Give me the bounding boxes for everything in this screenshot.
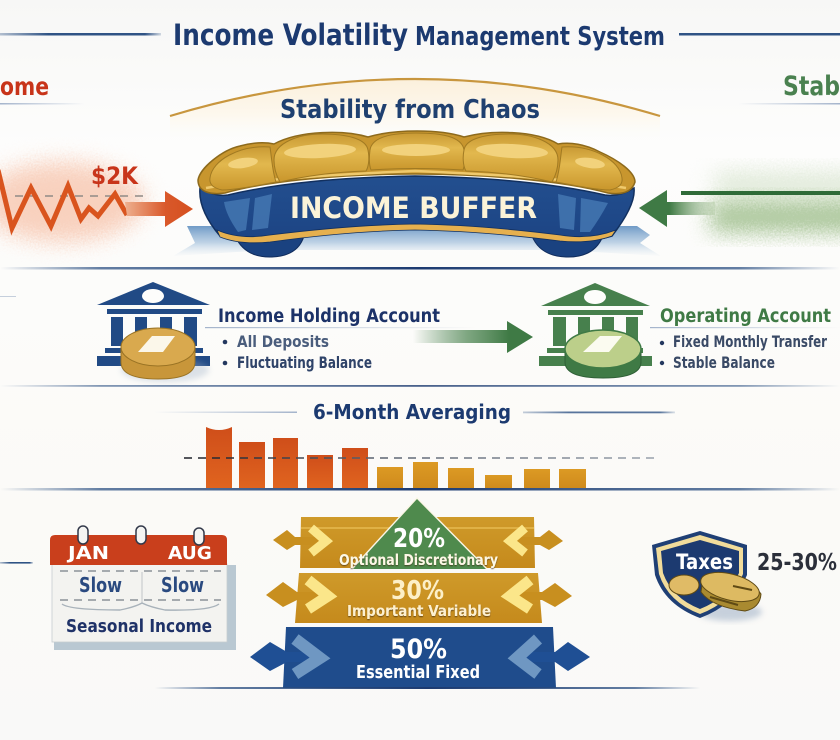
income buffer cushion — [173, 131, 661, 257]
taxes shield with coins: Taxes — [676, 550, 733, 574]
arrows right — [517, 530, 563, 550]
tier: 30% important variable: 30% — [391, 576, 444, 606]
icon: green coins — [565, 330, 641, 378]
list: holding account details: All Deposits — [237, 332, 329, 351]
cushion lobes — [210, 133, 622, 190]
label: volatile income heading: ome — [0, 72, 49, 101]
tier: 20% optional discretionary: 20% — [393, 524, 445, 554]
section divider — [155, 687, 700, 689]
tier: 30% important variable: Important Variable — [347, 602, 491, 620]
list: holding account details — [223, 332, 372, 372]
icon: blue bank — [97, 282, 210, 366]
calendar rings — [78, 526, 204, 545]
section divider — [0, 385, 840, 387]
arrows left — [273, 530, 318, 550]
calendar: seasonal income — [0, 526, 236, 650]
band highlights — [224, 194, 608, 232]
cushion feet — [235, 236, 603, 257]
tier: 50% essential fixed: Essential Fixed — [356, 662, 480, 683]
bar chart: monthly income — [184, 427, 659, 488]
tier: 50% essential fixed — [250, 627, 590, 688]
calendar: seasonal income: Seasonal Income — [66, 616, 212, 637]
header: title — [0, 18, 840, 52]
list: operating account details — [660, 332, 827, 372]
budget pyramid — [250, 497, 590, 688]
section divider — [0, 488, 840, 490]
calendar: seasonal income: Slow — [79, 573, 122, 597]
heading: income holding account: Income Holding Account — [218, 306, 440, 327]
tier: 50% essential fixed: 50% — [390, 634, 447, 665]
tier: 20% optional discretionary: Optional Discretionary — [339, 551, 498, 569]
volatile income chart with arrow: $2K — [91, 162, 139, 190]
panel: operating account — [539, 283, 840, 378]
icon: gold coins — [121, 328, 209, 382]
tier: 20% optional discretionary — [273, 497, 563, 569]
header: title: Income Volatility — [173, 18, 408, 52]
buffer label: INCOME BUFFER — [290, 191, 537, 225]
stable income band with arrow — [639, 172, 840, 232]
cushion band — [200, 176, 634, 242]
gold stripe — [217, 224, 616, 243]
list: holding account details: Fluctuating Balance — [237, 353, 372, 372]
list: operating account details: Stable Balance — [673, 353, 775, 372]
section divider — [0, 267, 840, 270]
label: stable income heading — [738, 71, 840, 104]
tier: 30% important variable — [266, 573, 572, 623]
label: volatile income heading — [0, 72, 85, 104]
gold cushion — [198, 131, 635, 194]
icon: green bank — [539, 283, 652, 366]
arc heading: stability from chaos — [170, 79, 660, 140]
volatile income chart with arrow — [0, 162, 193, 242]
panel: income holding account — [0, 282, 475, 382]
calendar: seasonal income: Slow — [161, 573, 204, 597]
icon: shield — [652, 531, 747, 618]
taxes shield with coins — [652, 531, 762, 621]
calendar: seasonal income: JAN — [66, 543, 109, 564]
cushion shadow — [173, 226, 661, 256]
icon: tax coins — [669, 567, 762, 611]
cushion highlights — [227, 142, 606, 170]
calendar: seasonal income: AUG — [168, 543, 212, 564]
heading: 6-month averaging: 6-Month Averaging — [313, 400, 511, 424]
arc heading: stability from chaos: Stability from Chaos — [280, 95, 540, 125]
arrow: holding to operating — [413, 321, 533, 353]
header: title: Management System — [415, 22, 665, 52]
